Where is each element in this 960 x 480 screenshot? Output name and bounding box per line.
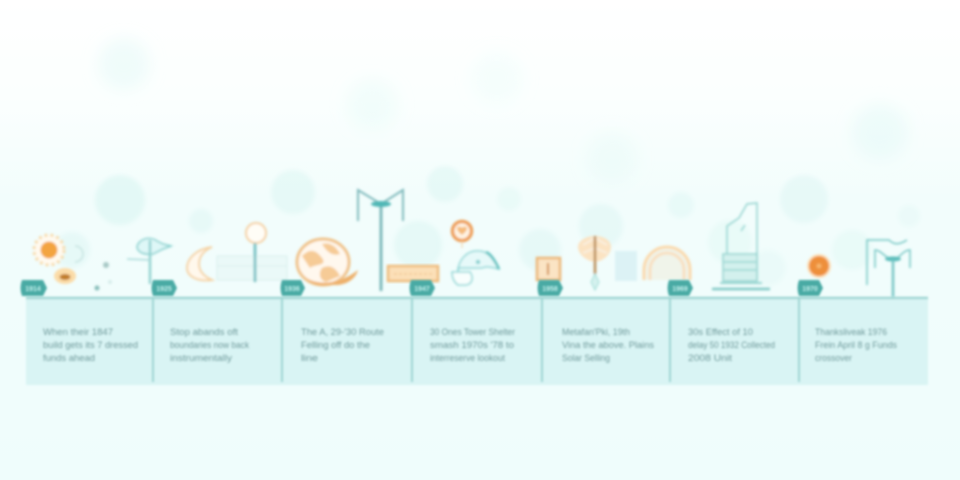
year badge labels: 1958 — [542, 286, 558, 293]
text: item 1 — [43, 327, 138, 363]
text: item 5: Vina the above. Plains — [562, 340, 655, 350]
icon: tree with orange leaves — [578, 236, 611, 290]
icon: orange crate — [537, 258, 560, 280]
text: item 7: Thanksliveak 1976 — [815, 327, 887, 337]
text: item 2: Stop abands oft — [170, 327, 239, 337]
text: item 6: 2008 Unit — [688, 353, 733, 363]
year badge labels: 1936 — [284, 286, 300, 293]
text: item 3: Felling off do the — [301, 340, 370, 350]
icon: location pin — [452, 222, 472, 248]
panel: description band — [26, 299, 928, 385]
year badge labels: 1925 — [156, 286, 172, 293]
year badge labels: 1914 — [25, 286, 41, 293]
icon: orange arch — [644, 247, 690, 280]
year badges — [20, 280, 823, 296]
icon: pale building — [615, 251, 637, 281]
thin ground line — [30, 279, 918, 281]
text: item 3: line — [301, 353, 318, 363]
description texts — [43, 327, 897, 363]
faint upper haze bubbles — [98, 38, 908, 184]
icon: twin-arm street lamp — [358, 190, 403, 291]
icon: sun and small sun — [34, 235, 112, 290]
icon: crescent moon — [187, 247, 212, 280]
text: item 2 — [170, 327, 249, 363]
text: item 2: boundaries now back — [170, 340, 249, 350]
text: item 3: The A, 29-'30 Route — [301, 327, 384, 337]
text: item 6: 30s Effect of 10 — [688, 327, 753, 337]
icon: double-arm lamp — [867, 240, 910, 297]
text: item 5: Metafan'Pki, 19th — [562, 327, 630, 337]
year badge labels — [25, 286, 818, 293]
text: item 5: Solar Selling — [562, 353, 610, 363]
icon: orange coin — [807, 254, 831, 278]
text: item 7: Frein April 8 g Funds — [815, 340, 897, 350]
text: item 1: funds ahead — [43, 353, 95, 363]
text: item 4: 30 Ones Tower Shelter — [430, 327, 515, 337]
icon: weather vane — [127, 238, 171, 284]
icon: teal bird — [452, 251, 499, 285]
background bubbles — [54, 166, 920, 286]
text: item 4: smash 1970s '78 to — [430, 340, 514, 350]
text: item 5 — [562, 327, 655, 363]
timeline axis and dividers — [26, 297, 928, 382]
text: item 3 — [301, 327, 384, 363]
icon: orange globe — [297, 239, 358, 285]
icon: monument tower — [712, 203, 770, 289]
year badge labels: 1970 — [802, 286, 818, 293]
year badge labels: 1969 — [672, 286, 688, 293]
text: item 6: delay 50 1932 Collected — [688, 340, 775, 350]
text: item 7: crossover — [815, 353, 852, 363]
text: item 1: build gets its 7 dressed — [43, 340, 138, 350]
icon: street lamp and building — [217, 223, 287, 282]
text: item 4 — [430, 327, 515, 363]
icon: orange box — [388, 266, 438, 281]
text: item 4: interreserve lookout — [430, 353, 505, 363]
year badge labels: 1947 — [414, 286, 430, 293]
text: item 7 — [815, 327, 897, 363]
text: item 6 — [688, 327, 775, 363]
text: item 2: instrumentally — [170, 353, 233, 363]
text: item 1: When their 1847 — [43, 327, 113, 337]
